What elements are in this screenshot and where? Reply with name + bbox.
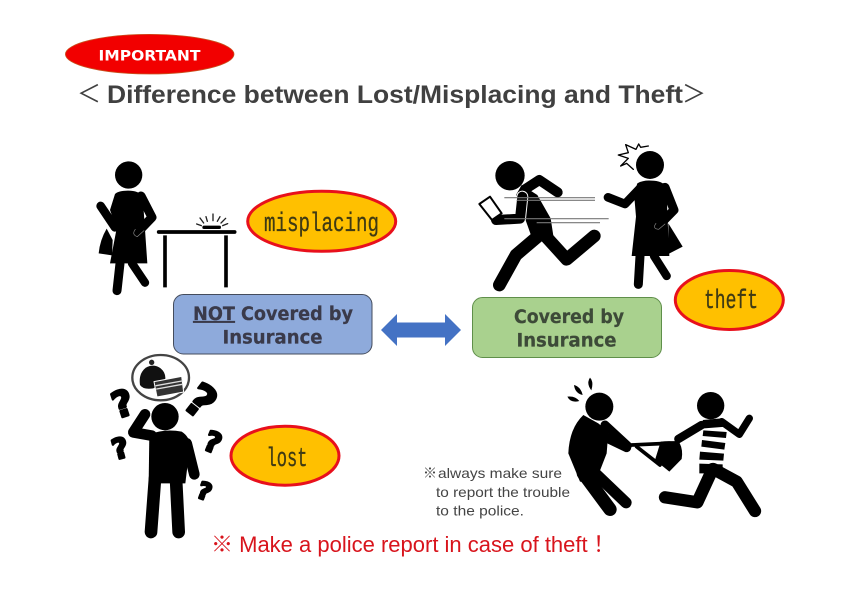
question marks: ? — [108, 431, 132, 467]
runner — [479, 161, 609, 285]
badge: IMPORTANT — [65, 34, 234, 74]
box: covered by insurance — [472, 298, 662, 358]
table — [159, 214, 235, 287]
woman — [608, 144, 683, 284]
badge: IMPORTANT: IMPORTANT — [98, 48, 201, 64]
title: Difference between Lost/Misplacing and Theft — [107, 81, 684, 109]
box: covered by insurance: Insurance — [516, 330, 616, 352]
label: theft — [675, 270, 783, 330]
label: lost: lost — [266, 445, 308, 475]
box: covered by insurance: Covered by — [514, 307, 624, 328]
icon: confused person with question marks — [107, 355, 227, 532]
question marks: ? — [199, 424, 226, 461]
question marks: ? — [107, 382, 139, 428]
title: ＞ — [682, 74, 706, 109]
thief — [665, 392, 755, 511]
victim — [567, 378, 627, 509]
note: report to police: ※ — [423, 465, 437, 481]
box: not covered by insurance: NOT — [193, 304, 235, 325]
box: not covered by insurance — [174, 294, 372, 354]
note: report to police — [423, 465, 570, 518]
icon: runner snatching tablet and surprised woman — [479, 144, 683, 285]
label: lost — [231, 426, 339, 485]
note: report to police: always make sure — [438, 465, 562, 481]
note: report to police: to report the trouble — [436, 484, 570, 500]
title: ＜ — [77, 74, 101, 109]
thought bubble with purse and card — [132, 355, 189, 400]
label: misplacing — [248, 191, 396, 251]
person — [133, 403, 194, 532]
bag — [632, 441, 682, 472]
icon: bag snatching struggle — [567, 378, 755, 511]
icon: woman beside table with misplaced item — [99, 161, 235, 291]
box: not covered by insurance: Covered by — [241, 304, 353, 325]
label: misplacing: misplacing — [264, 210, 379, 240]
callout: police report reminder: ※ Make a police report in case of theft！ — [211, 532, 610, 557]
title — [77, 74, 706, 109]
question marks: ? — [193, 476, 216, 507]
question marks: ? — [174, 373, 227, 430]
box: not covered by insurance: Insurance — [222, 328, 322, 348]
note: report to police: to the police. — [436, 502, 524, 518]
label: theft: theft — [704, 287, 758, 317]
arrow: double-headed — [381, 314, 461, 346]
question marks — [107, 373, 227, 507]
